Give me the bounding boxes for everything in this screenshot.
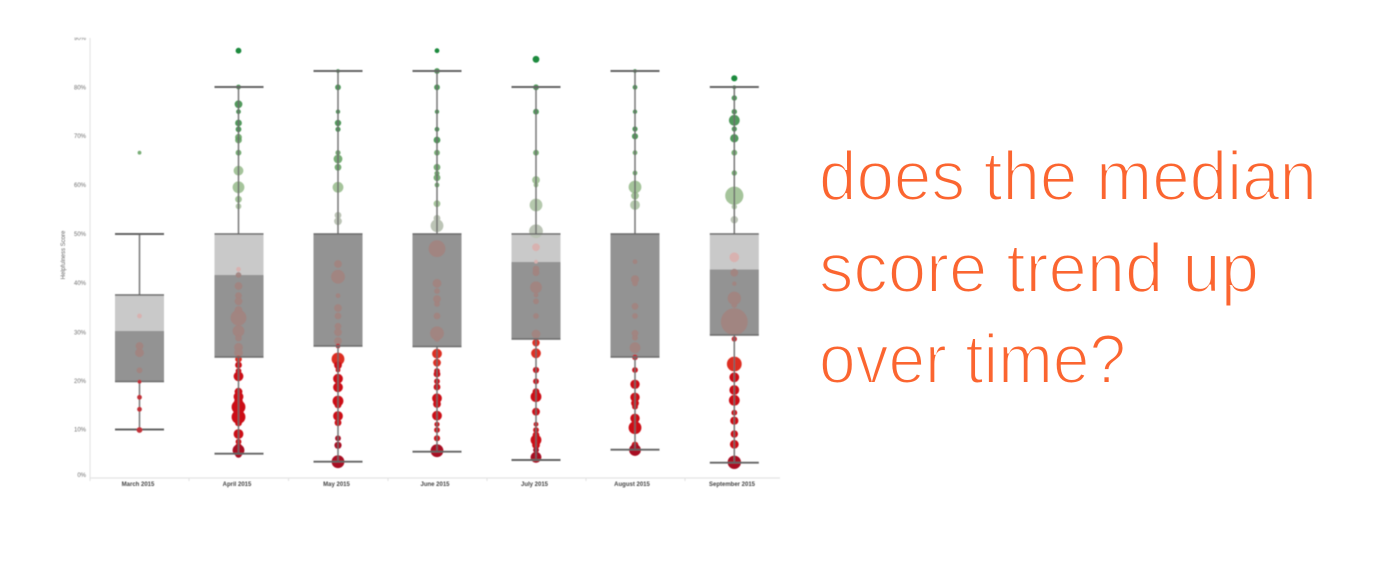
column: September 2015 — [710, 76, 759, 469]
x axis labels: May 2015 — [323, 482, 351, 488]
y axis labels: 20% — [74, 379, 87, 385]
y axis labels: 0% — [77, 473, 87, 479]
y axis labels: 30% — [74, 330, 87, 336]
question text: does the median — [819, 137, 1317, 215]
x axis labels: June 2015 — [420, 482, 450, 488]
y axis labels: 50% — [74, 232, 87, 238]
y axis labels: 90% — [74, 36, 87, 42]
y axis labels: 40% — [74, 281, 87, 287]
y axis labels: 10% — [74, 428, 87, 434]
y axis title: Helpfulness Score — [61, 230, 67, 279]
x axis labels: March 2015 — [122, 482, 155, 488]
column: May 2015 — [314, 70, 362, 468]
x axis labels: July 2015 — [521, 482, 549, 488]
box plot chart — [61, 30, 780, 488]
column: March 2015 — [115, 151, 164, 432]
question text: over time? — [819, 320, 1126, 398]
x axis labels — [122, 482, 756, 488]
question text — [819, 137, 1317, 398]
y axis labels — [70, 30, 88, 479]
y axis labels: 70% — [74, 134, 87, 140]
column: August 2015 — [610, 70, 660, 456]
x axis labels: August 2015 — [614, 482, 650, 488]
x axis labels: April 2015 — [223, 482, 252, 488]
column: June 2015 — [412, 49, 462, 457]
axes — [90, 38, 780, 481]
x axis labels: September 2015 — [709, 482, 756, 488]
column: July 2015 — [512, 56, 560, 462]
column: April 2015 — [214, 48, 264, 457]
y axis labels: 80% — [74, 86, 87, 92]
question text: score trend up — [819, 229, 1259, 307]
y axis labels: 60% — [74, 183, 87, 189]
